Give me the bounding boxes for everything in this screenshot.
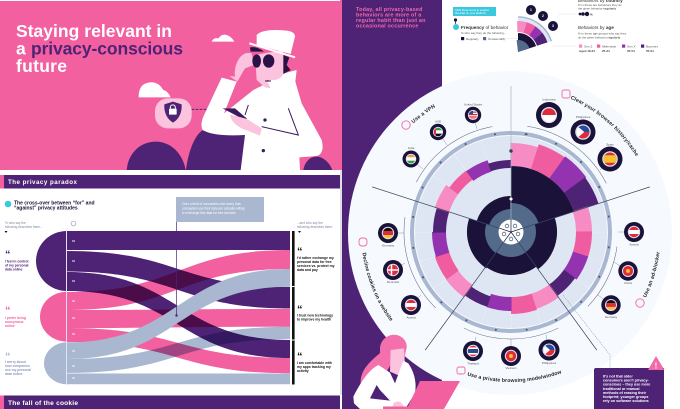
panel: hero: [0, 1, 340, 170]
sankey chart: [36, 230, 295, 385]
laptop: [383, 381, 460, 409]
section icons: [359, 90, 644, 374]
panel: purple statement: occasional occurrence: [356, 24, 419, 30]
left column text: how companies: [5, 364, 30, 368]
flag: Philippines: [538, 340, 560, 365]
section label: private browsing: Use a private browsing mode/window: [468, 370, 561, 383]
legend: behaviors by age: Aged 18-24: [579, 49, 595, 53]
flag: Philippines: Philippines: [576, 115, 591, 119]
legend: behaviors by age: Gen Z: [584, 44, 593, 48]
flag: Indonesia: Indonesia: [542, 98, 556, 102]
panel: sankey heading: The cross-over between “for” and: [14, 200, 95, 206]
flag: Vietnam: Vietnam: [506, 366, 517, 370]
flag: Spain: Spain: [606, 142, 614, 146]
left column text: online: [5, 324, 15, 328]
legend: numbered markers: 1: [530, 8, 532, 12]
left column text: “: [5, 351, 10, 363]
legend: frequency of behavior: Regularly: [466, 37, 479, 41]
legend: instruction tag: Click these icons to explore: [455, 8, 489, 12]
flag: Spain: [598, 142, 622, 172]
heading: the fall of the cookie: The fall of the cookie: [8, 400, 78, 407]
legend: frequency of behavior: Frequency of behavior: [461, 25, 509, 30]
callout: older consumers: footprint; younger groups: [603, 395, 648, 399]
flag: Denmark: [383, 260, 403, 284]
flag: Germany: [601, 295, 621, 319]
right column text: I am comfortable with: [297, 361, 332, 365]
heading: the privacy paradox: [0, 175, 340, 188]
side strip: [340, 0, 342, 395]
left column text: use my personal: [5, 368, 31, 372]
right column text: “: [297, 246, 302, 258]
right column text: activity: [297, 369, 309, 373]
flag: Denmark: Denmark: [387, 280, 400, 284]
callout: older consumers: !: [655, 362, 657, 370]
right column text: personal data for free: [297, 260, 332, 264]
panel: purple statement: Today, all privacy-based: [356, 7, 423, 13]
panel: sankey heading: “against” privacy attitudes: [14, 206, 78, 212]
legend: numbered markers: [500, 5, 575, 46]
flag: Austria: Austria: [406, 316, 416, 320]
legend: numbered markers: 3: [552, 24, 554, 28]
callout: older consumers: conscious – they use more: [603, 383, 650, 387]
legend: instruction tag: [453, 7, 496, 24]
illustration: woman with laptop: [353, 335, 416, 409]
legend: instruction tag: the data on your platform: [455, 11, 487, 15]
flag: India: [402, 146, 420, 168]
callout: older consumers: consumers aren't privacy-: [603, 379, 650, 383]
flag: Indonesia: [536, 98, 562, 128]
section label: use an ad-blocker: Use an ad-blocker: [642, 252, 660, 298]
legend: behaviors by age: % in these age groups who say they: [578, 32, 627, 36]
callout: older consumers: [563, 295, 664, 409]
inner regularly sectors: [478, 199, 544, 265]
dividers: [372, 86, 650, 350]
panel: radial background: [348, 71, 672, 395]
legend: frequency of behavior: % who say they do the following...: [461, 31, 506, 35]
flag: China: China: [624, 281, 632, 285]
callout: older consumers: It's not that older: [603, 374, 633, 378]
title: privacy-conscious: [31, 38, 183, 58]
right column text: “: [297, 304, 302, 316]
right column text: services vs. protect my: [297, 264, 335, 268]
legend: behaviors by age: Gen X: [627, 44, 636, 48]
left column text: of my personal: [5, 264, 29, 268]
legend: numbered markers: 2: [542, 14, 544, 18]
legend: behaviors by age: 25-34: [602, 49, 610, 53]
callout: over a third: companies use their data are actually willing: [182, 206, 245, 210]
bars: private browsing: [409, 130, 613, 334]
title: Staying relevant in: [16, 21, 172, 41]
flag: Philippines: Philippines: [542, 361, 557, 365]
bars: use a VPN: [413, 134, 609, 330]
flag: Austria: [401, 295, 421, 320]
bars: clear browser history: [400, 121, 622, 343]
legend: sample fan: [482, 16, 554, 88]
left column text: “: [5, 305, 10, 317]
flag: India: India: [408, 146, 415, 150]
flag: Austria: Austria: [629, 242, 639, 246]
callout: over a third: [175, 197, 264, 317]
callout: older consumers: rely on software solutions: [603, 399, 649, 403]
panel: sankey heading: [5, 200, 95, 212]
callout: over a third: to exchange this data for free services: [182, 211, 236, 215]
right column text: “: [297, 351, 302, 363]
panel: purple statement: [342, 0, 442, 409]
right column text: [297, 221, 335, 373]
legend: behaviors by age: do the given behavior regularly: [578, 36, 620, 40]
right column text: I'd rather exchange my: [297, 256, 334, 260]
heading: the fall of the cookie: [0, 396, 340, 409]
flag: Thailand: [463, 341, 483, 366]
left column text: [4, 221, 76, 376]
title: a: [16, 38, 26, 58]
title: future: [16, 56, 67, 76]
legend: frequency of behavior: Occasionally: [488, 37, 506, 41]
left column text: anonymous: [5, 320, 24, 324]
flag: UAE: UAE: [435, 120, 441, 124]
left column text: following describes them...: [5, 225, 43, 229]
legend: behaviors by age: 35-54: [627, 49, 635, 53]
flag: United States: [464, 102, 483, 123]
right column text: my apps tracking my: [297, 365, 331, 369]
flag: United States: United States: [464, 102, 483, 106]
bars: ad-blocker: [410, 131, 612, 333]
illustration: man with phone: [127, 30, 332, 170]
panel: purple statement: regular habit than just an: [356, 18, 426, 24]
legend: behaviors by age: Boomers: [646, 44, 659, 48]
legend: behaviors by age: [578, 25, 659, 53]
connectors: [388, 115, 634, 356]
panel: purple statement: behaviors are more of a: [356, 12, 422, 18]
section label: use a VPN: Use a VPN: [411, 104, 436, 123]
right column text: to improve my health: [297, 318, 331, 322]
callout: older consumers: traditional or manual: [603, 387, 639, 391]
legend: behaviors by age: 55-64: [646, 49, 654, 53]
callout: over a third: Over a third of consumers who worry how: [182, 202, 242, 206]
right column text: following describes them:: [297, 225, 333, 229]
legend: behaviors by country: % in these are behaviors they do: [578, 3, 622, 7]
inner occasionally sectors: [493, 214, 529, 250]
section label: decline cookies: Decline cookies on a website: [362, 252, 392, 321]
left column text: data online: [5, 268, 23, 272]
right column text: I trust new technology: [297, 314, 333, 318]
title: [16, 21, 183, 76]
left column text: data online: [5, 372, 23, 376]
radial chart: [360, 81, 662, 383]
right column text: data and pay: [297, 268, 318, 272]
heading: the privacy paradox: The privacy paradox: [8, 179, 78, 186]
section label: clear your browser history: Clear your browser history/cache: [571, 96, 638, 156]
flag: UAE: [430, 120, 446, 140]
flag: Thailand: Thailand: [467, 362, 479, 366]
left column text: % who say the: [5, 221, 26, 225]
flag: Germany: Germany: [605, 315, 618, 319]
legend: behaviors by age: Millennials: [602, 44, 617, 48]
left column text: I worry about: [5, 360, 27, 364]
legend: behaviors by country: %: [590, 12, 593, 16]
legend: behaviors by age: Behaviors by age: [578, 25, 614, 30]
left column text: I feel in control: [5, 260, 29, 264]
bars: decline cookies: [409, 130, 613, 334]
flag: Austria: [624, 222, 644, 246]
flag: Germany: [378, 223, 398, 248]
left column text: I prefer being: [5, 316, 26, 320]
flag: Philippines: [570, 115, 596, 144]
flag: Germany: Germany: [382, 244, 395, 248]
flag: Vietnam: [501, 346, 521, 370]
legend: behaviors by country: the given behavior regularly: [578, 6, 616, 10]
right column text: ...and who say the: [297, 221, 323, 225]
callout: older consumers: methods of erasing their: [603, 391, 647, 395]
centre icons: [498, 220, 524, 244]
flag: China: [618, 261, 638, 285]
legend: behaviors by country: [578, 0, 623, 16]
legend: frequency of behavior: [453, 24, 509, 41]
left column text: “: [5, 249, 10, 261]
